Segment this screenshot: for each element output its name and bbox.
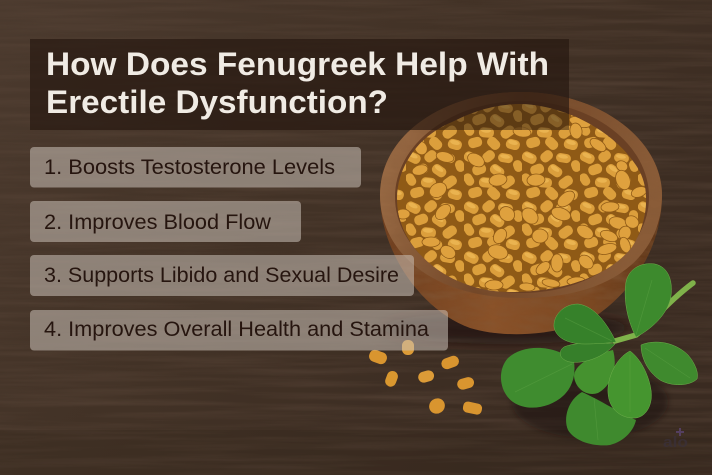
bottom leaf <box>566 392 636 445</box>
left big leaf <box>501 348 575 408</box>
top leaf <box>625 264 671 337</box>
fenugreek leaves <box>501 264 698 445</box>
scattered seeds <box>367 340 483 417</box>
bowl rim <box>380 92 662 298</box>
center teardrop leaf <box>608 351 651 418</box>
title text <box>46 46 549 120</box>
right leaf <box>641 342 698 385</box>
list item 4: 4. Improves Overall Health and Stamina <box>44 317 429 341</box>
list item 2 <box>30 201 301 242</box>
list item 3: 3. Supports Libido and Sexual Desire <box>44 263 399 287</box>
bowl shadow <box>380 312 630 344</box>
bowl body <box>380 92 662 334</box>
title text: How Does Fenugreek Help With <box>46 46 549 82</box>
list item 3 <box>30 255 414 296</box>
watermark logo: alo <box>663 434 688 451</box>
wooden bowl with fenugreek seeds <box>375 88 667 343</box>
list item 2: 2. Improves Blood Flow <box>44 210 271 234</box>
leaf veins <box>515 280 690 440</box>
title panel <box>30 39 569 130</box>
seeds showing through the panel <box>437 104 569 130</box>
seed pile <box>390 100 655 296</box>
stem <box>615 283 693 341</box>
lower middle leaf <box>574 350 615 394</box>
list item 4 <box>30 310 448 350</box>
upper left leaf <box>554 304 616 344</box>
list item 1: 1. Boosts Testosterone Levels <box>44 155 335 179</box>
narrow leaf <box>560 343 615 362</box>
watermark logo <box>663 428 688 451</box>
leaves shadow <box>512 366 668 438</box>
title text: Erectile Dysfunction? <box>46 84 388 120</box>
bowl inner wall <box>395 101 649 293</box>
list item 1 <box>30 147 361 188</box>
